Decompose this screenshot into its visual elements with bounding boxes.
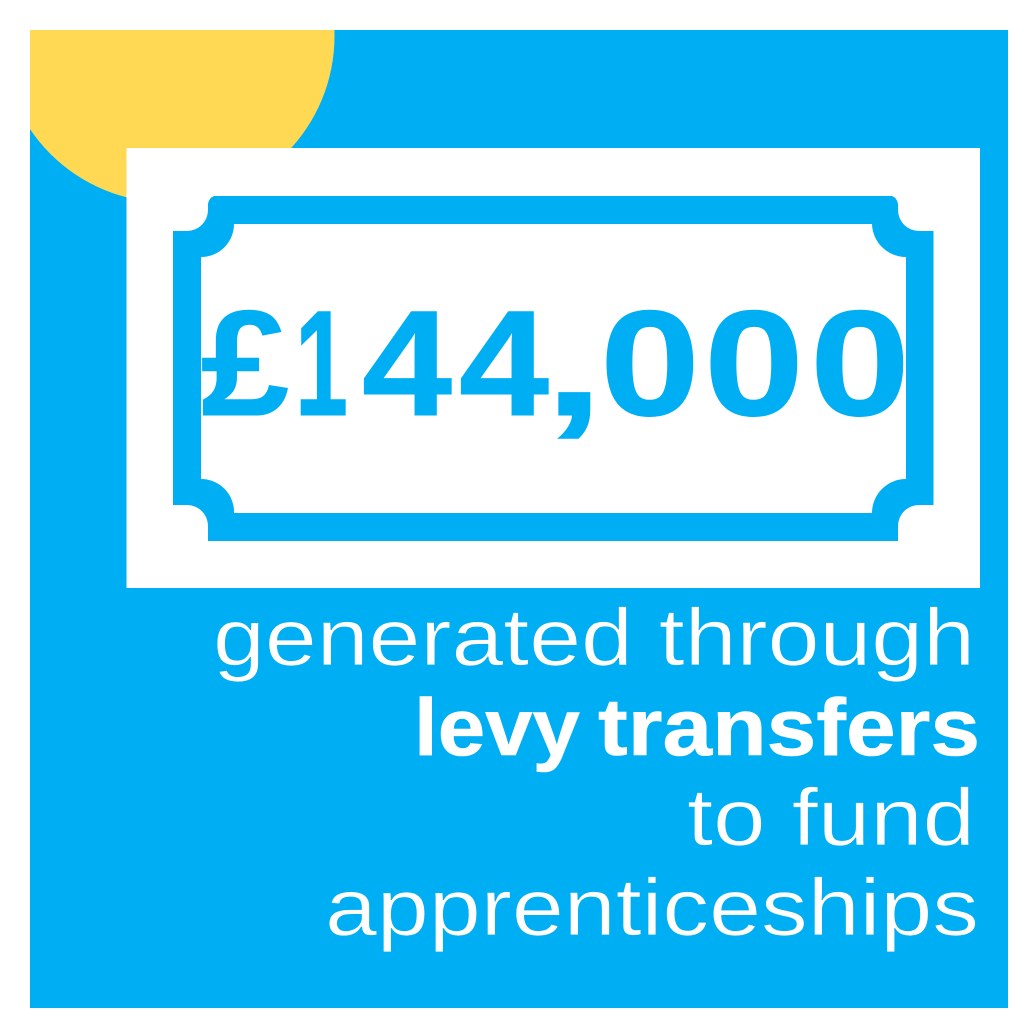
caption line 2: bold emphasis: transfers	[598, 683, 980, 773]
amount: £144,000: ,	[544, 279, 604, 447]
amount: £144,000: 0	[600, 279, 700, 447]
caption line 3: to fund	[687, 773, 975, 863]
banknote white backing	[126, 148, 980, 588]
amount: £144,000: £	[201, 279, 289, 447]
caption line 1: generated through	[213, 593, 975, 683]
amount: £144,000: 4	[362, 279, 452, 447]
banknote outline frame	[173, 196, 934, 541]
amount: £144,000: 0	[810, 279, 910, 447]
caption line 2: bold emphasis: levy	[414, 683, 580, 773]
caption text	[213, 593, 980, 953]
amount: £144,000: 4	[459, 279, 549, 447]
amount: £144,000: 1	[295, 279, 348, 447]
banknote icon with amount	[126, 148, 980, 588]
amount: £144,000: 0	[704, 279, 804, 447]
decorative yellow circle	[30, 30, 334, 198]
caption line 4: apprenticeships	[325, 863, 979, 953]
